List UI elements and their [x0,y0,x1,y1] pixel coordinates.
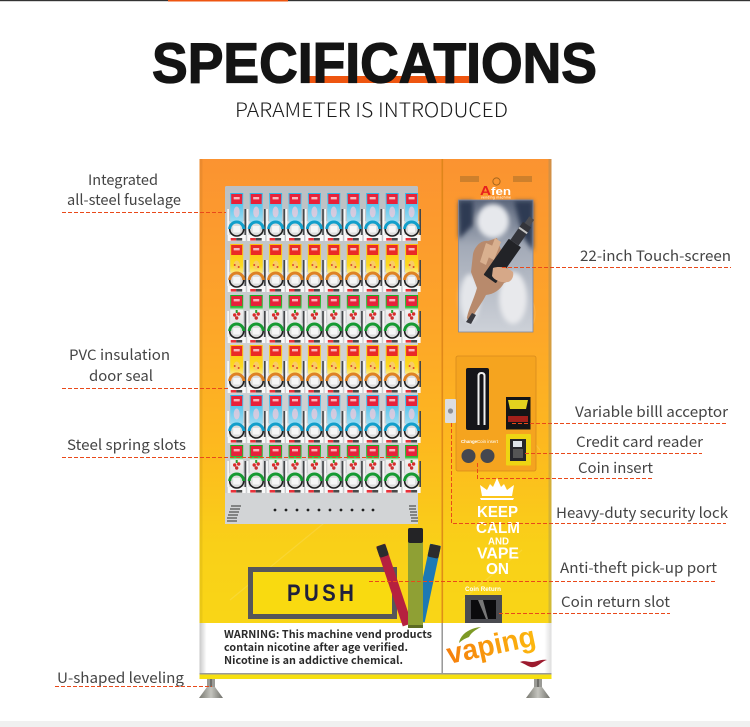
keep calm slogan: VAPE [477,546,519,562]
left foot [199,679,223,698]
bill slot [466,368,489,430]
label: integrated fuselage: Integrated [88,169,158,190]
speakers and camera [460,176,532,185]
coin return slot: Coin Return [465,587,501,593]
label: integrated fuselage: all-steel fuselage [67,189,181,210]
keep calm slogan: AND [488,536,509,548]
label: security lock [452,423,728,524]
keep calm slogan: KEEP [477,504,518,521]
blue pen [414,544,441,622]
label: coin insert [478,457,654,478]
bottom trim [200,673,552,679]
push door: PUSH [287,579,357,606]
touch screen [458,200,538,332]
right foot [526,679,550,698]
shelf rows of products [227,193,421,493]
keep calm slogan: ON [486,561,509,578]
label: coin insert: Coin insert [578,457,654,478]
push door [250,570,394,616]
brand logo: A [480,183,492,198]
label: door seal: PVC insulation [69,344,170,365]
label: integrated fuselage [62,169,226,212]
label: touch screen: 22-inch Touch-screen [580,245,731,266]
door divider [442,159,443,623]
product window [225,186,421,524]
brand logo: fen [491,186,511,198]
credit card reader [506,434,531,466]
vape pens [376,528,441,628]
bill acceptor [506,397,530,430]
label: card reader: Credit card reader [576,431,703,452]
label: security lock: Heavy-duty security lock [556,502,728,523]
brand logo [480,183,511,200]
warning text: Nicotine is an addictive chemical. [224,652,403,668]
label: pick-up port: Anti-theft pick-up port [560,557,718,578]
warning text [224,626,432,668]
warning text: contain nicotine after age verified. [224,639,408,655]
change and coin buttons: Coin insert [477,439,499,444]
red pen [376,544,412,626]
brand logo: vending machine [481,196,511,200]
security lock [445,399,456,423]
change and coin buttons: Change [461,439,478,444]
warning and brand band [200,621,552,674]
bottom band [0,721,750,727]
keep calm slogan [476,478,520,578]
label: door seal [62,344,228,388]
title: SPECIFICATIONS [152,32,597,96]
keep calm slogan: CALM [476,520,520,537]
green pen [408,528,423,628]
label: spring slots: Steel spring slots [67,434,186,455]
top rule [0,0,750,2]
vaping logo: vaping [444,621,538,671]
label: coin return: Coin return slot [561,591,671,612]
label: leveling foot: U-shaped leveling [57,667,184,688]
machine body [200,159,552,673]
warning text: WARNING: This machine vend products [224,626,432,642]
change and coin buttons [461,439,499,463]
label: door seal: door seal [89,365,153,386]
label: bill acceptor: Variable billl acceptor [575,401,728,422]
coin return slot [465,587,502,623]
hand holding vape [466,214,538,324]
vending machine [199,159,552,698]
smoke [459,201,533,324]
dispensing bay with dots and vents [225,493,418,524]
subtitle: PARAMETER IS INTRODUCED [235,94,508,123]
payment panel [456,356,536,471]
